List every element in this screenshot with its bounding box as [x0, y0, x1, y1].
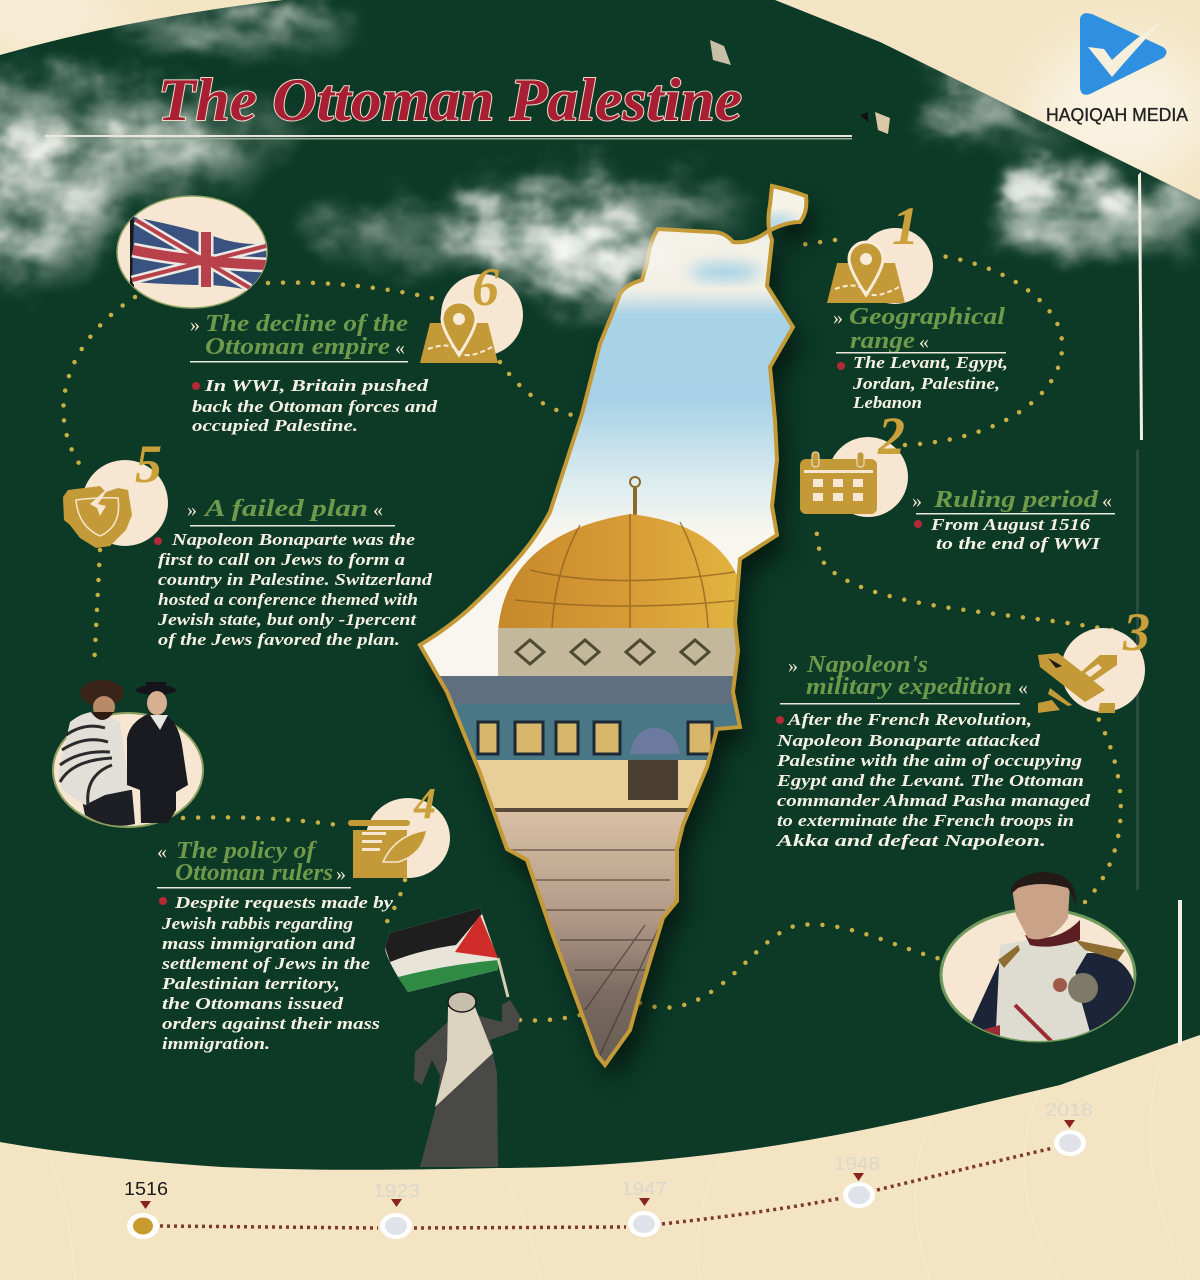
step 5: a failed plan — [63, 434, 433, 649]
body text: mass immigration and — [162, 934, 356, 953]
heading: » — [187, 499, 197, 521]
heading: » — [788, 655, 798, 677]
heading — [190, 311, 408, 362]
heading: « — [1018, 677, 1028, 699]
left rabbi in prayer shawl — [58, 680, 135, 826]
body text: to exterminate the French troops in — [777, 811, 1074, 830]
body text: immigration. — [162, 1034, 270, 1053]
body text: of the Jews favored the plan. — [158, 630, 400, 649]
heading: A failed plan — [202, 496, 368, 522]
timeline point 1923: 1923 — [373, 1181, 420, 1201]
drum — [498, 628, 748, 676]
blue sky patches — [690, 216, 797, 281]
heading: The policy of — [176, 838, 317, 864]
logo: Haqiqah Media — [1046, 13, 1188, 125]
body text: Jewish state, but only -1percent — [157, 610, 417, 629]
body text: hosted a conference themed with — [158, 590, 418, 609]
step 3: Napoleon's expedition — [776, 602, 1150, 850]
heading: military expedition — [806, 674, 1012, 700]
decorative torn paper bits — [710, 40, 1182, 1045]
icon: broken shield — [63, 434, 168, 548]
timeline point 1947 — [621, 1179, 667, 1237]
step 4: policy of Ottoman rulers — [157, 779, 450, 1053]
body text: commander Ahmad Pasha managed — [777, 791, 1091, 810]
body text — [837, 353, 1008, 412]
icon: broken shield: 5 — [135, 434, 162, 494]
body text: Lebanon — [852, 393, 922, 412]
man — [414, 1000, 520, 1167]
timeline — [124, 1100, 1093, 1239]
body text: the Ottomans issued — [162, 994, 344, 1013]
dotted route connecting the steps — [63, 240, 1121, 1020]
body text: The Levant, Egypt, — [853, 353, 1008, 372]
icon: calendar — [800, 406, 908, 517]
icon: map pin — [420, 257, 523, 363]
heading — [833, 304, 1006, 354]
timeline point 2018: 2018 — [1045, 1100, 1093, 1120]
body text: In WWI, Britain pushed — [204, 376, 429, 395]
body text: Palestinian territory, — [161, 974, 340, 993]
timeline point 1947: 1947 — [621, 1179, 667, 1199]
body text — [192, 376, 438, 435]
body text — [776, 710, 1091, 850]
icon: calendar: 2 — [877, 406, 905, 466]
step 1: geographical range — [827, 196, 1008, 412]
icon: crossed swords: 3 — [1122, 602, 1150, 662]
heading: Ruling period — [933, 487, 1099, 513]
heading: « — [373, 499, 383, 521]
title: The Ottoman Palestine — [158, 67, 742, 133]
heading: The decline of the — [205, 311, 408, 337]
heading: Geographical — [849, 304, 1005, 330]
body text: to the end of WWI — [936, 534, 1102, 553]
heading: Ottoman empire — [205, 334, 390, 360]
body text: Egypt and the Levant. The Ottoman — [776, 771, 1084, 790]
icon: map pin: 1 — [892, 196, 919, 256]
heading — [780, 652, 1028, 704]
dome finial — [630, 477, 640, 516]
heading — [187, 496, 395, 526]
body text: back the Ottoman forces and — [192, 397, 438, 416]
lower wall — [476, 760, 707, 808]
timeline point 1516: 1516 — [124, 1179, 168, 1199]
body text: orders against their mass — [162, 1014, 380, 1033]
heading: » — [336, 863, 346, 885]
heading: « — [157, 841, 167, 863]
body text: Napoleon Bonaparte was the — [171, 530, 416, 549]
body text: Despite requests made by — [174, 893, 394, 912]
flag — [385, 908, 508, 997]
body text: Napoleon Bonaparte attacked — [776, 731, 1041, 750]
icon: map pin — [827, 196, 933, 304]
photo: British flag — [117, 196, 267, 308]
heading: » — [912, 490, 922, 512]
map of Palestine with Dome of the Rock — [415, 180, 815, 1081]
body text: After the French Revolution, — [787, 710, 1032, 729]
step 2: ruling period — [800, 406, 1115, 553]
timeline dotted line — [160, 1148, 1053, 1228]
body text: From August 1516 — [930, 515, 1091, 534]
photo: Jewish rabbis — [53, 680, 203, 827]
icon: scroll and quill: 4 — [413, 779, 436, 828]
cloud drifting over map top — [550, 232, 670, 284]
heading: » — [190, 314, 200, 336]
right man in black suit — [127, 682, 188, 823]
body text — [159, 893, 394, 1053]
body text: Akka and defeat Napoleon. — [776, 831, 1046, 850]
body text: occupied Palestine. — [192, 416, 358, 435]
icon: map pin: 6 — [472, 257, 499, 317]
heading: Ottoman rulers — [175, 860, 333, 886]
heading: « — [919, 331, 929, 353]
timeline point 1948 — [834, 1154, 880, 1208]
body text: country in Palestine. Switzerland — [158, 570, 433, 589]
body text — [914, 515, 1102, 553]
clouds — [0, 14, 1200, 304]
body text: Jordan, Palestine, — [852, 374, 1000, 393]
heading: « — [395, 337, 405, 359]
heading — [157, 838, 351, 888]
timeline point 1948: 1948 — [834, 1154, 880, 1174]
timeline point 2018 — [1045, 1100, 1093, 1156]
body text: settlement of Jews in the — [161, 954, 371, 973]
heading: » — [833, 307, 843, 329]
figure: protester waving Palestinian flag — [385, 908, 520, 1167]
heading: range — [850, 328, 915, 354]
logo: Haqiqah Media: HAQIQAH MEDIA — [1046, 105, 1188, 125]
icon: crossed swords — [1038, 602, 1150, 713]
sky — [422, 188, 804, 676]
photo: Napoleon portrait — [941, 872, 1135, 1050]
icon: scroll and quill — [348, 779, 450, 878]
body text — [154, 530, 433, 649]
body text: Palestine with the aim of occupying — [776, 751, 1083, 770]
timeline point 1516 — [124, 1179, 168, 1239]
step 6: decline of the Ottoman empire — [190, 257, 523, 435]
body text: first to call on Jews to form a — [158, 550, 406, 569]
golden dome — [498, 514, 745, 632]
heading — [912, 487, 1115, 514]
tiled facade — [440, 676, 734, 704]
heading: Napoleon's — [806, 652, 928, 678]
body text: Jewish rabbis regarding — [161, 914, 354, 933]
courtyard — [496, 812, 686, 1062]
heading: « — [1102, 490, 1112, 512]
timeline point 1923 — [373, 1181, 420, 1239]
title underline — [45, 135, 852, 140]
